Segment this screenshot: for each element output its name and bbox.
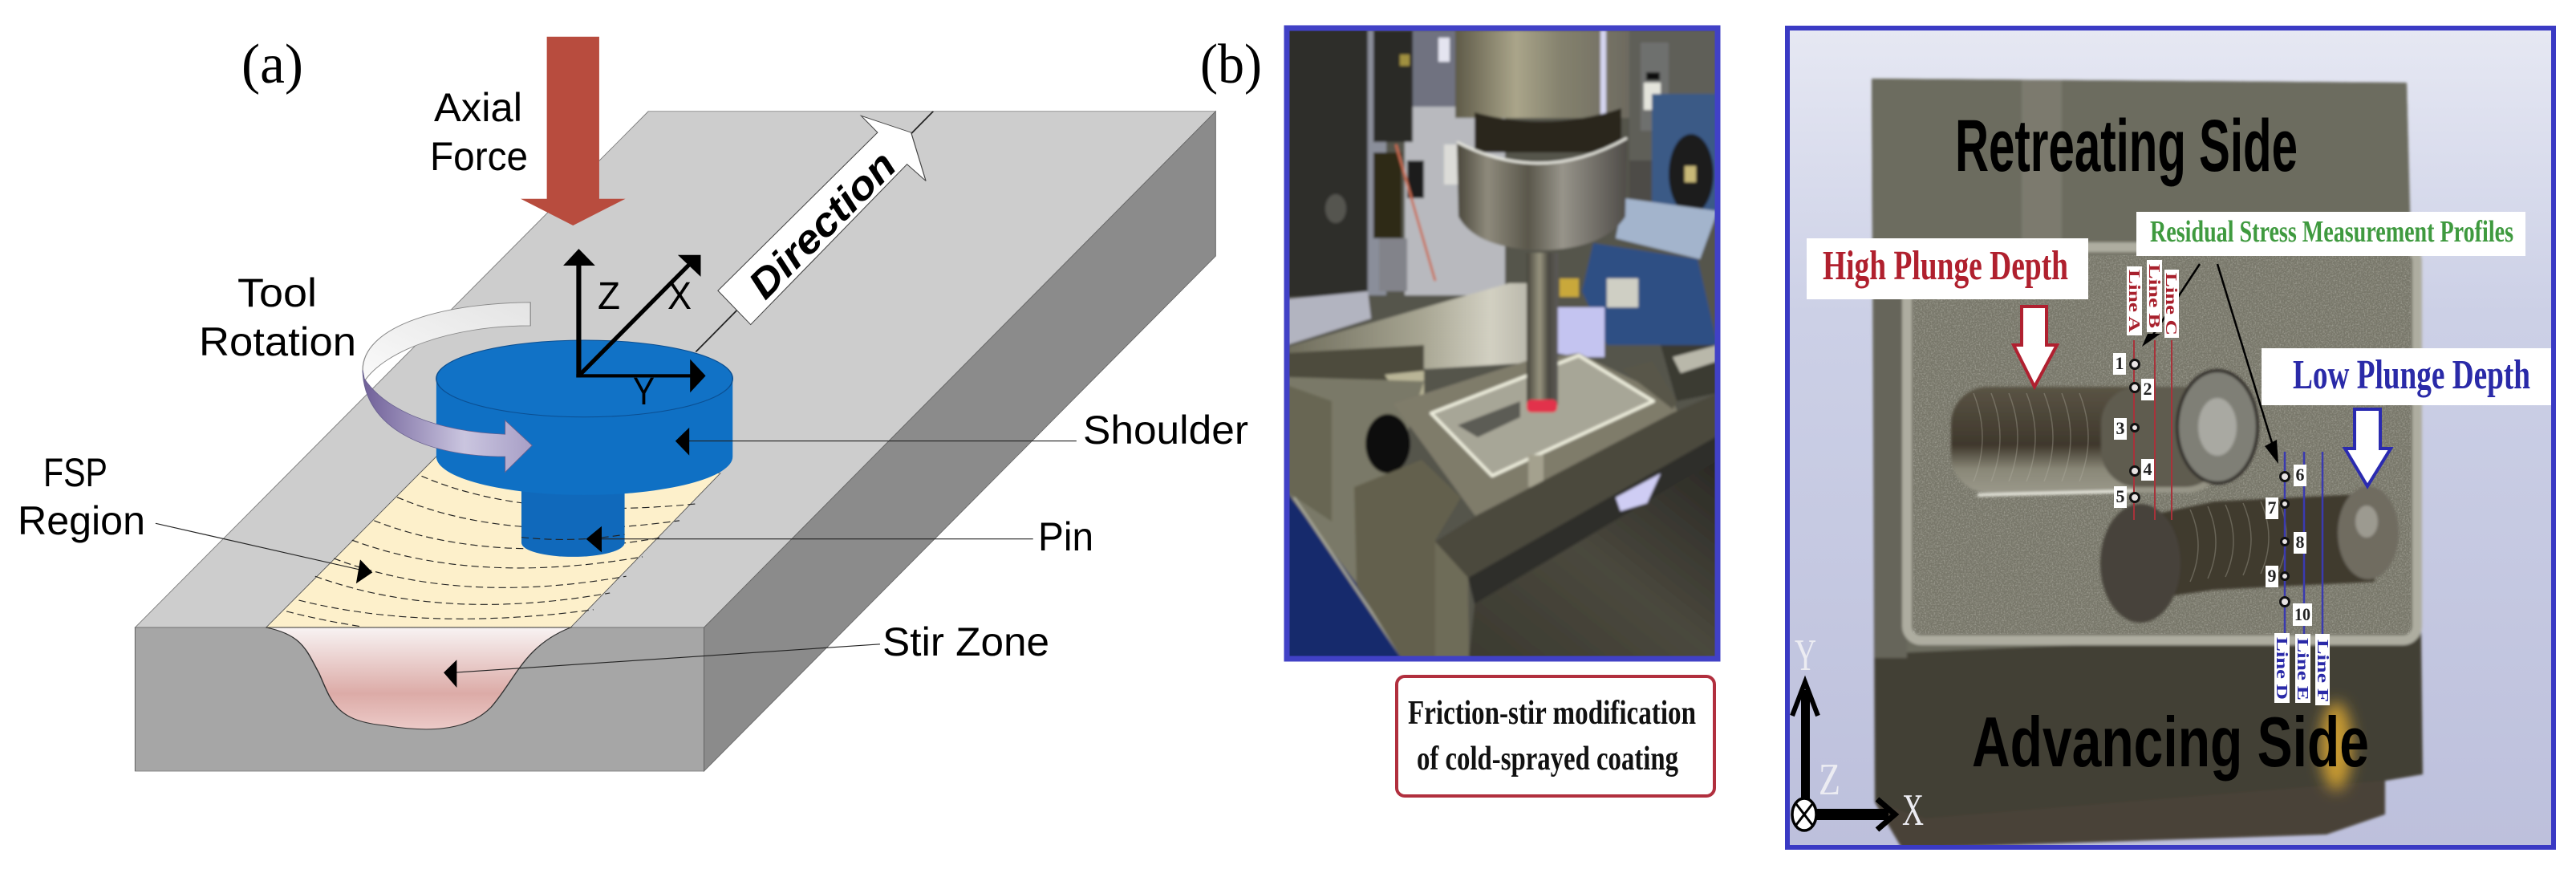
label: axial force — [430, 85, 528, 179]
profile line labels A to C: Line C — [2162, 273, 2180, 335]
sample axes: X — [1902, 786, 1924, 835]
label: FSP region — [18, 450, 145, 543]
arrow: low plunge — [2345, 409, 2391, 486]
label: FSP region: Region — [18, 498, 145, 543]
caption box — [1397, 676, 1714, 796]
direction label: Direction — [740, 142, 905, 307]
photo of friction stir tool on coated plate — [1287, 28, 1718, 659]
profile line labels D to F: Line F — [2314, 640, 2331, 702]
sample axes — [1792, 631, 1924, 835]
FSP region with dashed stir arcs — [266, 457, 720, 627]
measurement point numbers: 1 — [2115, 353, 2124, 373]
lower weld track — [2158, 493, 2375, 598]
panel: processed plate photo — [1787, 28, 2554, 847]
photo frame — [1787, 28, 2554, 847]
measurement point numbers: 3 — [2116, 418, 2124, 438]
measurement point numbers: 8 — [2296, 532, 2304, 552]
panel: machine photo — [1287, 28, 1718, 796]
measurement point numbers: 7 — [2267, 497, 2277, 518]
measurement point numbers: 10 — [2294, 604, 2310, 624]
measurement point numbers: 2 — [2144, 379, 2152, 399]
callout: high plunge depth: High Plunge Depth — [1823, 243, 2068, 289]
panel: friction stir processing schematic — [18, 34, 1262, 771]
arrow: high plunge — [2014, 307, 2057, 387]
label: stir zone: Stir Zone — [882, 619, 1049, 664]
measurement profile lines and arrows — [2134, 264, 2322, 634]
stir zone — [266, 627, 570, 729]
axis labels: Y — [633, 371, 655, 413]
profile line labels A to C: Line B — [2145, 264, 2163, 328]
caption box: Friction-stir modification — [1408, 695, 1696, 732]
callout: high plunge depth — [1807, 238, 2088, 299]
heading (b): (b) — [1200, 34, 1262, 95]
measurement point numbers: 5 — [2116, 486, 2124, 506]
coordinate axes — [563, 249, 706, 392]
profile line labels A to C: Line A — [2125, 270, 2143, 333]
label: tool rotation: Tool — [237, 270, 317, 315]
measurement point numbers — [2113, 353, 2312, 626]
tool rotation arrow — [363, 303, 532, 472]
tool pin — [521, 485, 625, 557]
callout: low plunge depth — [2262, 348, 2551, 405]
sample axes: Z — [1819, 755, 1840, 805]
photo frame — [1287, 28, 1718, 659]
tool shoulder — [436, 340, 732, 495]
measurement point numbers: 6 — [2296, 465, 2304, 485]
profile line labels D to F: Line D — [2273, 637, 2290, 700]
measurement point numbers: 9 — [2267, 566, 2277, 586]
handwriting: advancing side: Advancing Side — [1972, 702, 2369, 782]
upper weld track — [1951, 387, 2224, 493]
label: pin: Pin — [1038, 514, 1093, 559]
leader arrows — [156, 428, 1077, 688]
profile line labels A to C — [2125, 260, 2180, 338]
profile line labels D to F — [2273, 633, 2331, 705]
heading (a): (a) — [241, 34, 303, 95]
label: shoulder: Shoulder — [1083, 408, 1248, 453]
label: axial force: Axial — [434, 85, 522, 130]
workpiece block — [135, 112, 1215, 771]
measurement points — [2131, 359, 2290, 607]
reflection — [2320, 702, 2352, 790]
measurement point numbers: 4 — [2144, 459, 2152, 479]
profile line labels D to F: Line E — [2294, 638, 2311, 700]
caption box: of cold-sprayed coating — [1417, 741, 1678, 778]
axis labels: Z — [598, 275, 620, 318]
handwriting: retreating side: Retreating Side — [1955, 105, 2298, 187]
label: tool rotation: Rotation — [199, 319, 356, 364]
sample axes: Y — [1795, 631, 1816, 680]
axis labels: X — [667, 275, 692, 318]
axial force arrow — [521, 37, 626, 225]
plate photo — [1787, 28, 2554, 847]
label: tool rotation — [199, 270, 356, 364]
axis labels — [598, 275, 692, 413]
direction arrow — [718, 116, 926, 325]
label: FSP region: FSP — [43, 450, 108, 495]
label: axial force: Force — [430, 134, 528, 179]
callout: residual stress profiles — [2136, 212, 2525, 256]
weld ripples — [1974, 393, 2286, 582]
